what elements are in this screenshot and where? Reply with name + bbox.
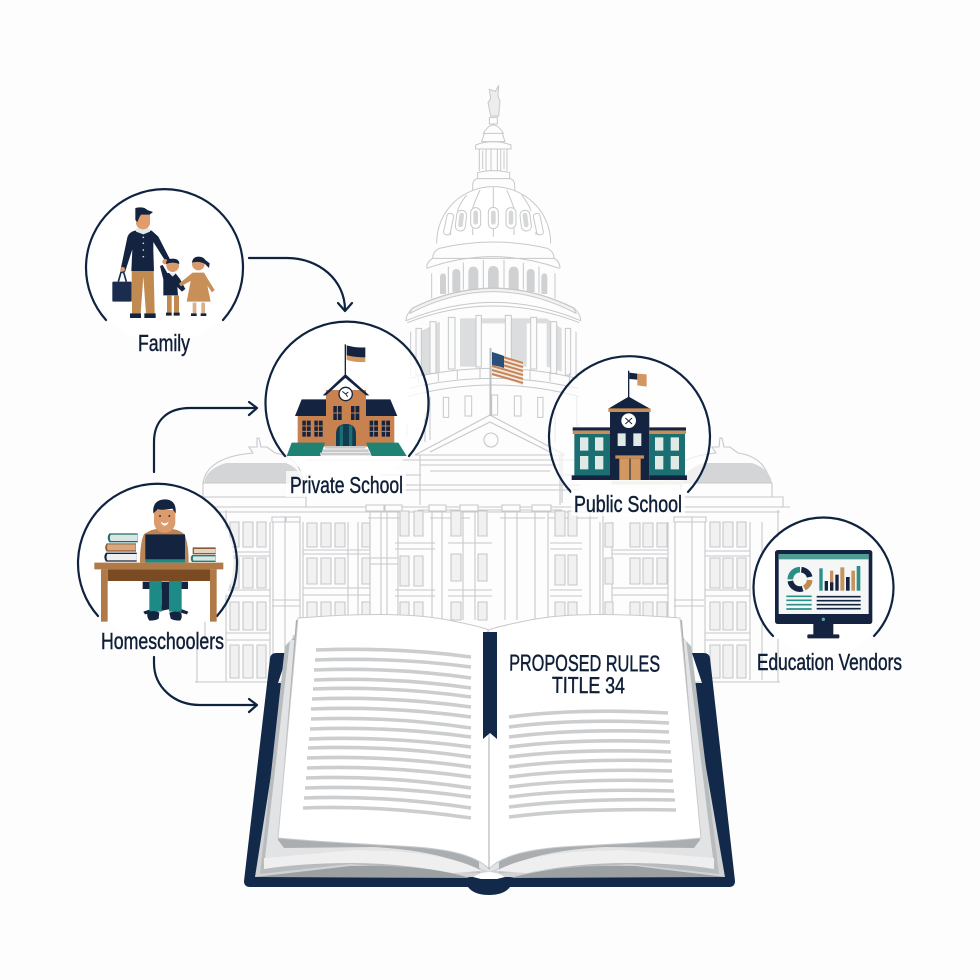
arrow: homeschoolers to private school: [154, 402, 257, 472]
text lines: right page: [509, 711, 676, 817]
icon: private school building: [287, 344, 407, 456]
panel: public school: [549, 356, 710, 517]
central pediment: [415, 412, 565, 505]
arrow: homeschoolers to book: [154, 657, 257, 712]
heading: proposed rules title 34: PROPOSED RULES: [509, 649, 660, 677]
label: public school: [571, 490, 685, 516]
icon: student at desk: [94, 499, 223, 622]
ribbon bookmark: [483, 632, 497, 739]
icon: monitor dashboard: [775, 550, 872, 638]
icon: family group: [112, 207, 215, 318]
panel: homeschoolers: [78, 484, 237, 654]
panel: public school: Public School: [574, 491, 682, 517]
label: private school: [286, 471, 406, 497]
heading: proposed rules title 34: [509, 649, 660, 699]
right wing dome: [668, 438, 770, 483]
open book: proposed rules: [244, 614, 735, 895]
capitol flag: [490, 348, 523, 416]
icon: public school building: [572, 371, 687, 485]
label: education vendors: Education Vendors: [757, 649, 902, 675]
wing bodies: [195, 510, 780, 683]
label: family: Family: [138, 330, 190, 356]
left wing dome: [203, 438, 303, 483]
panel: education vendors: [754, 518, 902, 675]
page stack: [255, 635, 725, 877]
book cover: [244, 653, 735, 895]
panel: private school: [266, 322, 428, 498]
columns: [370, 510, 603, 620]
white pages: [278, 614, 490, 869]
arrow: family to private school: [249, 258, 352, 311]
panel: family: [86, 189, 243, 356]
windows: [230, 511, 746, 678]
entablature: [200, 483, 790, 512]
capitol lower wings: [195, 412, 790, 683]
capitol dome and rotunda: [406, 85, 581, 440]
capitol building line drawing: [195, 85, 790, 683]
heading: proposed rules title 34: TITLE 34: [552, 672, 625, 698]
label: homeschoolers: Homeschoolers: [101, 628, 224, 654]
text lines: left page: [303, 649, 471, 818]
panel: private school: Private School: [290, 472, 403, 498]
